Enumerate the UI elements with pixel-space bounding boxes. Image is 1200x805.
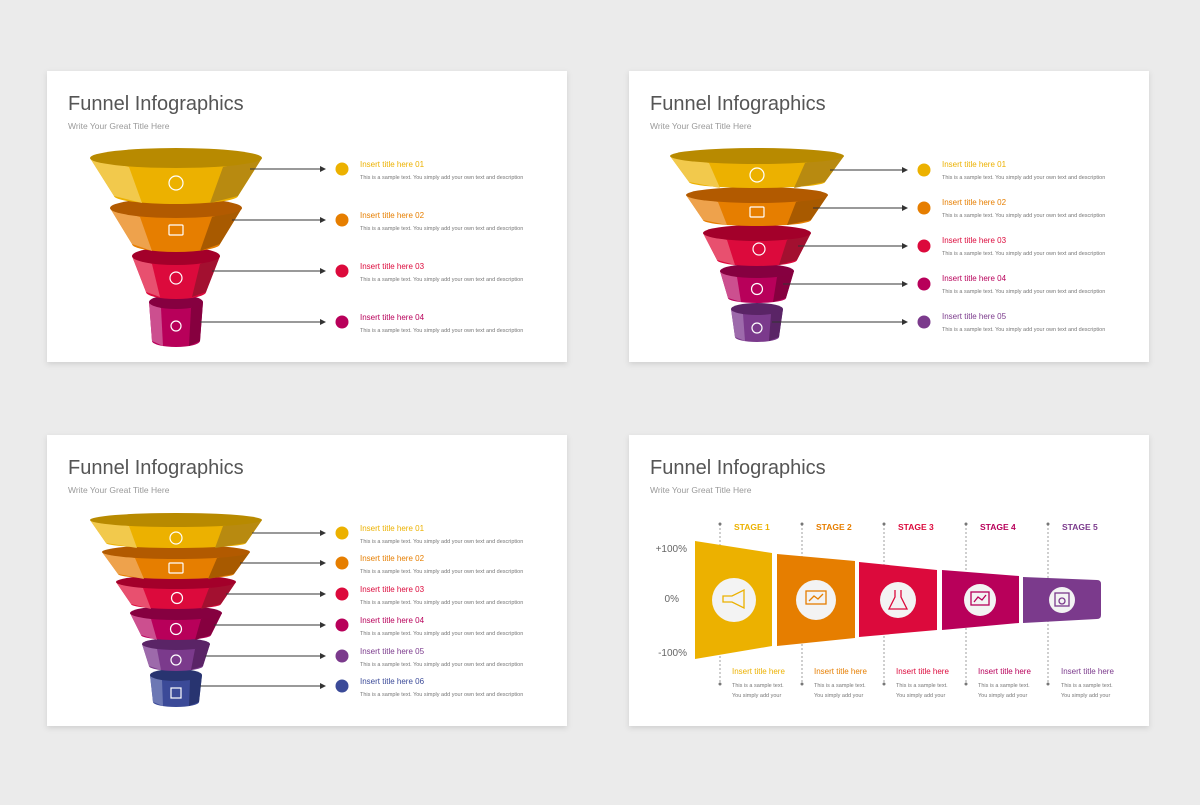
arrows and labels: This is a sample text. You simply add your own text and description <box>942 327 1105 333</box>
arrows and labels: Insert title here 06 <box>360 677 425 686</box>
arrows and labels: Insert title here 05 <box>360 647 425 656</box>
arrows and labels: This is a sample text. You simply add your own text and description <box>360 175 523 181</box>
stage labels: STAGE 3 <box>898 522 934 532</box>
panel: bottom-right horizontal stage funnel: This is a sample text. <box>978 683 1030 689</box>
panel: bottom-right horizontal stage funnel <box>629 435 1149 726</box>
stage segments <box>695 541 1101 659</box>
panel: bottom-right horizontal stage funnel: This is a sample text. <box>1061 683 1113 689</box>
stage labels: STAGE 4 <box>980 522 1016 532</box>
arrows and labels: Insert title here 03 <box>942 236 1007 245</box>
arrows and labels: Insert title here 05 <box>942 312 1007 321</box>
arrows and labels: This is a sample text. You simply add your own text and description <box>942 175 1105 181</box>
panel: top-left 4-step funnel <box>47 71 567 362</box>
arrows and labels: This is a sample text. You simply add your own text and description <box>942 251 1105 257</box>
arrows and labels: Insert title here 02 <box>360 211 425 220</box>
arrows and labels: This is a sample text. You simply add your own text and description <box>360 277 523 283</box>
stage text blocks <box>732 667 1114 676</box>
arrows and labels: Insert title here 04 <box>942 274 1007 283</box>
stage labels: STAGE 5 <box>1062 522 1098 532</box>
panel: bottom-right horizontal stage funnel: You simply add your <box>1061 693 1110 699</box>
subtitle: Write Your Great Title Here <box>650 485 752 495</box>
axis labels: +100% <box>656 544 687 555</box>
arrows and labels: This is a sample text. You simply add your own text and description <box>360 662 523 668</box>
panel: bottom-right horizontal stage funnel: This is a sample text. <box>732 683 784 689</box>
panel: bottom-right horizontal stage funnel: You simply add your <box>896 693 945 699</box>
subtitle: Write Your Great Title Here <box>650 121 752 131</box>
stage icon circles <box>712 578 1075 622</box>
title: Funnel Infographics <box>650 93 826 115</box>
title: Funnel Infographics <box>68 457 244 479</box>
arrows and labels: This is a sample text. You simply add your own text and description <box>360 539 523 545</box>
arrows and labels <box>772 160 1105 333</box>
arrows and labels: Insert title here 03 <box>360 585 425 594</box>
arrows and labels: This is a sample text. You simply add your own text and description <box>360 226 523 232</box>
axis labels: 0% <box>665 594 679 605</box>
axis labels <box>656 544 687 659</box>
arrows and labels: Insert title here 02 <box>360 554 425 563</box>
panel: bottom-right horizontal stage funnel: You simply add your <box>978 693 1027 699</box>
funnel: 4 layers <box>90 148 262 347</box>
panel: top-right 5-step funnel <box>629 71 1149 362</box>
arrows and labels: This is a sample text. You simply add your own text and description <box>942 213 1105 219</box>
arrows and labels: This is a sample text. You simply add your own text and description <box>942 289 1105 295</box>
panel: bottom-right horizontal stage funnel: You simply add your <box>732 693 781 699</box>
arrows and labels: Insert title here 03 <box>360 262 425 271</box>
stage labels <box>734 522 1098 532</box>
subtitle: Write Your Great Title Here <box>68 485 170 495</box>
stage labels: STAGE 2 <box>816 522 852 532</box>
arrows and labels <box>200 160 523 334</box>
panel: bottom-right horizontal stage funnel: This is a sample text. <box>814 683 866 689</box>
arrows and labels: This is a sample text. You simply add your own text and description <box>360 600 523 606</box>
arrows and labels: This is a sample text. You simply add your own text and description <box>360 328 523 334</box>
arrows and labels: Insert title here 01 <box>360 160 425 169</box>
funnel: 5 layers <box>670 148 844 342</box>
stage labels: STAGE 1 <box>734 522 770 532</box>
axis labels: -100% <box>658 648 687 659</box>
panel: bottom-right horizontal stage funnel: This is a sample text. <box>896 683 948 689</box>
funnel: 6 layers <box>90 513 262 707</box>
arrows and labels <box>200 524 523 698</box>
stage text blocks: Insert title here <box>978 667 1031 676</box>
title: Funnel Infographics <box>68 93 244 115</box>
stage text blocks: Insert title here <box>814 667 867 676</box>
arrows and labels: Insert title here 04 <box>360 616 425 625</box>
arrows and labels: Insert title here 02 <box>942 198 1007 207</box>
arrows and labels: Insert title here 01 <box>360 524 425 533</box>
arrows and labels: This is a sample text. You simply add your own text and description <box>360 631 523 637</box>
arrows and labels: This is a sample text. You simply add your own text and description <box>360 692 523 698</box>
arrows and labels: Insert title here 01 <box>942 160 1007 169</box>
stage text blocks: Insert title here <box>732 667 785 676</box>
panel: bottom-left 6-step funnel <box>47 435 567 726</box>
panel: bottom-right horizontal stage funnel: You simply add your <box>814 693 863 699</box>
stage text blocks: Insert title here <box>1061 667 1114 676</box>
arrows and labels: This is a sample text. You simply add your own text and description <box>360 569 523 575</box>
title: Funnel Infographics <box>650 457 826 479</box>
subtitle: Write Your Great Title Here <box>68 121 170 131</box>
stage text blocks: Insert title here <box>896 667 949 676</box>
arrows and labels: Insert title here 04 <box>360 313 425 322</box>
